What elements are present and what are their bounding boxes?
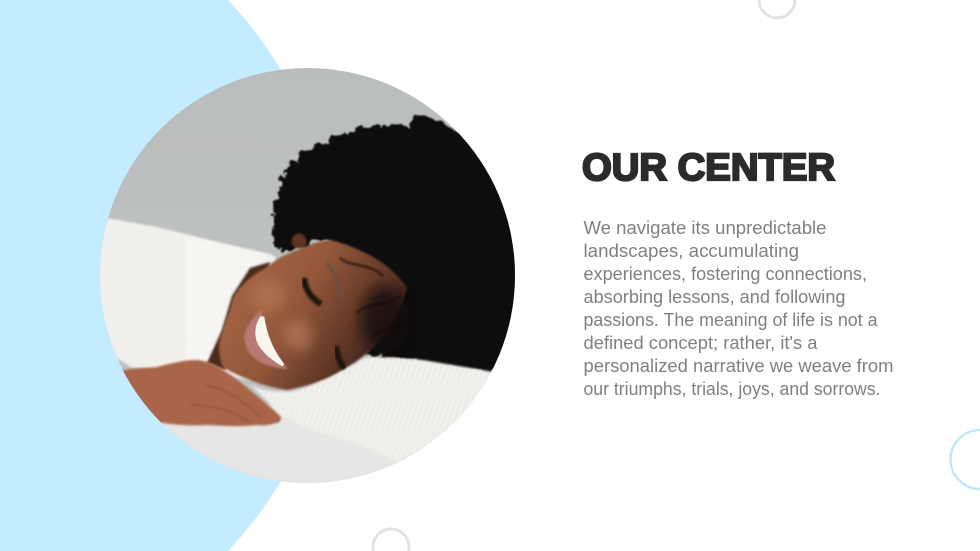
- circular photo: smiling woman resting on a white sweater: [95, 60, 525, 490]
- decorative ring: bottom: [373, 529, 409, 551]
- heading: OUR CENTER: [582, 147, 835, 189]
- body paragraph: landscapes, accumulating: [584, 241, 799, 261]
- curls over the forehead: [340, 258, 405, 366]
- pillow fold of the sweater: [250, 357, 510, 462]
- body paragraph: [584, 218, 894, 399]
- body paragraph: absorbing lessons, and following: [584, 287, 846, 307]
- lower eye lashes: [336, 346, 345, 369]
- ear: [292, 234, 306, 248]
- sweater sleeve: [95, 216, 285, 380]
- body paragraph: experiences, fostering connections,: [584, 264, 867, 284]
- finger creases: [190, 385, 262, 422]
- body paragraph: our triumphs, trials, joys, and sorrows.: [584, 379, 880, 399]
- table surface: [150, 404, 428, 483]
- cheek highlight: [250, 280, 286, 312]
- eyebrow: [327, 263, 342, 300]
- shadow at the temple: [361, 286, 409, 354]
- sweater cuff: [229, 246, 271, 256]
- body paragraph: We navigate its unpredictable: [584, 218, 826, 238]
- hair: [271, 116, 525, 373]
- face: [219, 240, 407, 390]
- body paragraph: passions. The meaning of life is not a: [584, 310, 878, 330]
- mouth lips: [244, 309, 288, 369]
- photo wall background: [95, 60, 525, 490]
- teeth: [257, 318, 283, 365]
- blue background shape: [0, 0, 338, 551]
- neck shadow: [207, 262, 270, 370]
- decorative ring: right: [951, 430, 980, 489]
- body paragraph: defined concept; rather, it's a: [584, 333, 818, 353]
- nose highlight: [284, 319, 312, 351]
- upper eye lashes: [304, 278, 321, 304]
- body paragraph: personalized narrative we weave from: [584, 356, 894, 376]
- hand: [112, 360, 281, 426]
- decorative ring: top: [759, 0, 795, 18]
